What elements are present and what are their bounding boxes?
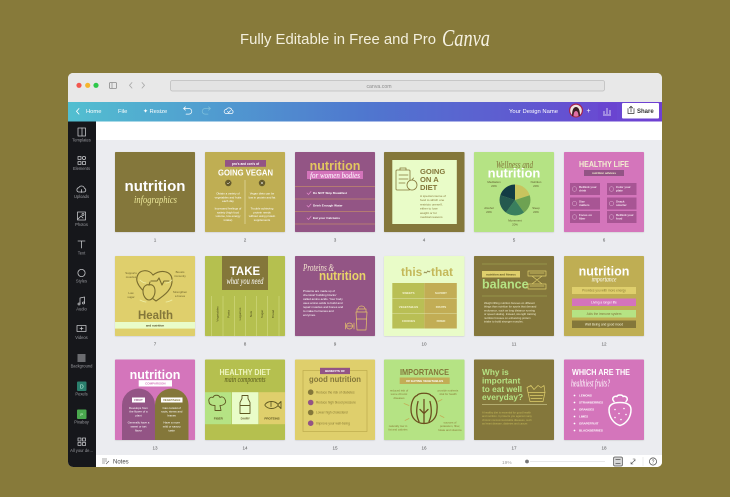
card 5: wellness and nutrition pie chart: 20%	[486, 210, 492, 214]
card 13: nutrition comparison: Can consist of	[163, 406, 181, 410]
icon: bottle	[240, 396, 250, 414]
card 15: benefits of good nutrition: Reduce high blood pressure	[316, 401, 356, 405]
card 7: health and nutrition: a bones	[175, 294, 186, 298]
card 16: importance of eating vegetables: 16	[421, 446, 427, 450]
card 18: which are the healthiest fruits: LIMES	[579, 414, 588, 418]
card 10: this or that table	[384, 256, 464, 346]
card 16: importance of eating vegetables: naturally low in	[389, 424, 408, 428]
card 3: nutrition for women bodies	[295, 152, 375, 242]
avatar	[569, 104, 583, 118]
card 2: going vegan: intake)	[224, 218, 232, 222]
card 9: proteins and nutrition: called amino acids. Your body	[303, 297, 343, 301]
card 12: nutrition importance: nutrition	[579, 264, 629, 278]
card 1: nutrition infographics: nutrition	[124, 178, 186, 195]
card 3: nutrition for women bodies: Do NOT Skip Breakfast	[313, 191, 347, 195]
card 2: going vegan: 2	[244, 238, 247, 242]
left sidebar: Styles	[76, 278, 87, 284]
card 9: proteins and nutrition: enzymes.	[303, 313, 316, 317]
card 14: healthy diet: main components	[224, 375, 266, 384]
card 6: healthy life: smarter	[616, 203, 627, 207]
icon: lettuce	[411, 393, 437, 424]
card 8: take what you need: 8	[244, 342, 247, 346]
card 9: proteins and nutrition: nutrition	[319, 269, 366, 283]
card 13: nutrition comparison: 13	[152, 446, 158, 450]
card 13: nutrition comparison: roots, stems and	[161, 410, 183, 414]
card 2: going vegan: without using protein	[249, 214, 276, 218]
card 6: healthy life: HEALTHY LIFE	[579, 159, 629, 169]
card 7: health and nutrition: Low	[128, 291, 135, 295]
left sidebar: All your de...	[70, 448, 93, 453]
card 3: nutrition for women bodies: nutrition	[310, 159, 360, 173]
card 5: wellness and nutrition pie chart: Sleep	[532, 206, 540, 210]
card 10: this or that table: VEGETABLES	[399, 305, 418, 309]
card 7: health and nutrition: muscles	[126, 275, 137, 279]
card 13: nutrition comparison: nutrition	[130, 368, 180, 382]
bottom status bar: 19%	[502, 460, 512, 466]
pie chart	[500, 184, 530, 215]
card 18: which are the healthiest fruits: LEMONS	[579, 394, 592, 398]
card 6: healthy life: fiber	[579, 216, 586, 220]
card 16: importance of eating vegetables	[384, 360, 464, 450]
card 7: health and nutrition: 7	[154, 342, 157, 346]
card 5: wellness and nutrition pie chart: 20%	[533, 210, 539, 214]
card 18: which are the healthiest fruits	[564, 360, 644, 450]
left sidebar: Templates	[72, 138, 91, 142]
left sidebar	[68, 122, 96, 468]
card 9: proteins and nutrition: to make hormones and	[303, 309, 334, 313]
card 16: importance of eating vegetables: potassium, fiber,	[440, 424, 460, 428]
left sidebar: Background	[71, 364, 93, 368]
card 10: this or that table: 10	[421, 342, 427, 346]
card 16: importance of eating vegetables: fat and calories	[389, 428, 408, 432]
editor top bar: Home	[86, 109, 101, 115]
card 8: take what you need: Legumes	[238, 307, 242, 320]
left sidebar: Videos	[75, 335, 88, 340]
left sidebar: Pexels	[75, 392, 88, 396]
card 11: nutrition and fitness balance: balance	[482, 278, 529, 292]
card 5: wellness and nutrition pie chart: Alcohol	[484, 206, 494, 210]
card 5: wellness and nutrition pie chart: 20%	[533, 184, 539, 188]
card 17: why is important to eat well: to eat well	[482, 384, 522, 394]
card 8: take what you need: what you need	[226, 276, 264, 286]
browser window	[68, 73, 662, 468]
card 16: importance of eating vegetables: some chronic	[391, 392, 408, 396]
card 4: going on a diet: ON A	[420, 175, 439, 184]
card 8: take what you need: Bread	[271, 310, 275, 318]
card 16: importance of eating vegetables: folate and vitamins	[438, 428, 462, 432]
card 18: which are the healthiest fruits: 18	[601, 446, 607, 450]
card 5: wellness and nutrition pie chart: Meditation	[487, 180, 501, 184]
card 4: going on a diet: 4	[423, 238, 426, 242]
card 11: nutrition and fitness balance: Weight lifting nutrition focuses on different	[484, 301, 535, 305]
left sidebar: P	[80, 412, 83, 417]
title: Canva	[442, 26, 490, 52]
left sidebar: D	[80, 384, 84, 390]
card 7: health and nutrition: Health	[138, 310, 173, 322]
icon: basket	[527, 386, 545, 402]
card 10: this or that table: FRIED	[437, 319, 445, 323]
left sidebar: Text	[78, 250, 86, 256]
card 8: take what you need: Sugar	[260, 310, 264, 318]
left sidebar: Photos	[75, 222, 88, 227]
card 13: nutrition comparison: the flower of a	[129, 410, 148, 414]
card 18: which are the healthiest fruits: STRAWBERRIES	[579, 400, 603, 404]
card 12: nutrition importance: Well Being and good mood	[585, 322, 623, 326]
card 9: proteins and nutrition: Proteins &	[302, 263, 334, 274]
card 10: this or that table: COOKIES	[402, 319, 415, 323]
card 9: proteins and nutrition: uses amino acids to build and	[303, 301, 343, 305]
bottom status bar: ?	[652, 460, 655, 466]
card 13: nutrition comparison: taste	[169, 428, 175, 432]
card 15: benefits of good nutrition	[295, 360, 375, 450]
card 7: health and nutrition: immunity	[174, 274, 186, 278]
white ribbon and canvas background	[96, 122, 662, 455]
card 6: healthy life: Rethink your	[579, 185, 598, 189]
card 14: healthy diet: FIBER	[214, 416, 224, 420]
card 8: take what you need: Nuts	[249, 310, 253, 317]
card 16: importance of eating vegetables: reduced risk of	[390, 388, 408, 392]
card 11: nutrition and fitness balance: nutrition focuses on enhancing protein	[484, 316, 531, 320]
card 8: take what you need: Pasta	[226, 310, 230, 318]
browser title bar: canva.com	[366, 84, 392, 90]
card 15: benefits of good nutrition: 15	[332, 446, 338, 450]
card 18: which are the healthiest fruits: GRAPEFRUIT	[579, 422, 599, 426]
card 13: nutrition comparison: leaves	[168, 414, 176, 418]
card 16: importance of eating vegetables: IMPORTANCE	[400, 367, 449, 377]
card 17: why is important to eat well: and nutrition. It protects you against many	[482, 414, 533, 418]
card 8: take what you need: Vegetables	[216, 306, 220, 322]
card 2: going vegan: vegetables and fruits	[215, 195, 242, 199]
card 3: nutrition for women bodies: Eat your Calciums	[313, 216, 340, 220]
card 9: proteins and nutrition: repair muscles and bones and	[303, 305, 344, 309]
card 17: why is important to eat well: A healthy diet is essential for good health	[482, 410, 531, 414]
card 11: nutrition and fitness balance: or speed skating. Instead, strength training	[484, 312, 536, 316]
editor top bar: File	[118, 109, 127, 115]
card 18: which are the healthiest fruits: WHICH ARE THE	[572, 367, 630, 377]
card 2: going vegan: satiety (high food	[217, 210, 239, 214]
card 2: going vegan: Trouble achieving	[251, 206, 274, 210]
card 7: health and nutrition: Boosts	[176, 270, 185, 274]
card 10: this or that table: that	[431, 265, 453, 279]
card 15: benefits of good nutrition: good nutrition	[309, 374, 361, 384]
card 13: nutrition comparison: Develops from	[129, 406, 148, 410]
card 7: health and nutrition: Supports	[125, 271, 137, 275]
card 16: importance of eating vegetables: provide nutrients	[438, 388, 459, 392]
card 16: importance of eating vegetables: vital for health	[439, 392, 457, 396]
card 6: healthy life: Snack	[616, 200, 625, 204]
editor top bar: ✦ Resize	[143, 108, 167, 115]
card 6: healthy life: Rethink your	[616, 213, 635, 217]
card 2: going vegan: supplements	[254, 218, 271, 222]
card 6: healthy life: food	[616, 216, 622, 220]
card 5: wellness and nutrition pie chart: 5	[513, 238, 516, 242]
card 4: going on a diet: restricts oneself,	[420, 202, 443, 206]
icon: heart with apple	[137, 271, 172, 301]
card 6: healthy life: Color your	[616, 185, 631, 189]
card 6: healthy life: plate	[616, 188, 623, 192]
card 4: going on a diet: either to lose	[420, 207, 438, 211]
card 2: going vegan: protein needs	[253, 210, 271, 214]
card 13: nutrition comparison: Generally have a	[128, 420, 150, 424]
card 5: wellness and nutrition pie chart: 20%	[512, 222, 518, 226]
card 8: take what you need	[205, 256, 285, 346]
card 11: nutrition and fitness balance: things than nutrition for sports that demand	[484, 305, 537, 309]
card 3: nutrition for women bodies: Drink Enough Water	[313, 204, 343, 208]
card 15: benefits of good nutrition: Improve your well-being	[316, 421, 350, 425]
icon: broccoli	[209, 395, 226, 410]
icon: scale	[528, 271, 546, 289]
card 5: wellness and nutrition pie chart: 20%	[491, 184, 497, 188]
left sidebar: Pixabay	[74, 420, 90, 424]
card 11: nutrition and fitness balance: intake to build stronger muscles.	[484, 320, 524, 324]
card 17: why is important to eat well: as heart disease, diabetes and cancer.	[482, 422, 528, 426]
editor top bar: +	[586, 108, 591, 115]
card 4: going on a diet: A special course of	[420, 194, 446, 198]
icon: strawberry	[609, 395, 631, 426]
card 12: nutrition importance: importance	[592, 274, 617, 284]
card 4: going on a diet: DIET	[420, 183, 438, 192]
editor top bar	[68, 102, 662, 122]
share button	[622, 103, 659, 118]
card 17: why is important to eat well: chronic noncommunicable diseases, such	[482, 418, 532, 422]
card 14: healthy diet: DAIRY	[241, 416, 250, 420]
card 7: health and nutrition	[115, 256, 195, 346]
card 5: wellness and nutrition pie chart: Movement	[508, 218, 522, 222]
card 12: nutrition importance: Living a longer life	[591, 300, 617, 304]
card 14: healthy diet: 14	[242, 446, 248, 450]
card 15: benefits of good nutrition: BENEFITS OF	[325, 369, 345, 373]
card 13: nutrition comparison: plant	[135, 414, 142, 418]
card 13: nutrition comparison: sweet or tart	[131, 424, 147, 428]
card 4: going on a diet: medical reasons	[420, 215, 443, 219]
card 2: going vegan: pro's and con's of	[232, 162, 260, 166]
card 16: importance of eating vegetables: diseases	[393, 396, 405, 400]
icon: fish	[265, 402, 281, 408]
card 9: proteins and nutrition: Proteins are made up of	[303, 289, 335, 293]
card 17: why is important to eat well: 17	[511, 446, 517, 450]
card 18: which are the healthiest fruits: ORANGES	[579, 408, 594, 412]
card 5: wellness and nutrition pie chart: Nutrition	[531, 180, 542, 184]
card 7: health and nutrition: sugar	[127, 295, 135, 299]
card 6: healthy life: Size	[579, 200, 585, 204]
card 13: nutrition comparison: Have a more	[163, 420, 180, 424]
card 5: wellness and nutrition pie chart: Wellness and	[496, 160, 534, 171]
card 4: going on a diet: food to which one	[420, 198, 445, 202]
card 12: nutrition importance: 12	[601, 342, 607, 346]
editor top bar: Your Design Name	[509, 109, 558, 115]
card 6: healthy life: drink	[579, 188, 586, 192]
title: Fully Editable in Free and Pro	[240, 32, 436, 48]
card 12: nutrition importance: Provides you with more energy	[582, 289, 626, 293]
card 10: this or that table: SWEETS	[402, 291, 415, 295]
left sidebar: Elements	[73, 166, 90, 171]
card 6: healthy life: nutrition advices	[592, 171, 616, 175]
card 14: healthy diet: PROTEINS	[264, 416, 280, 420]
title	[240, 26, 490, 52]
card 12: nutrition importance: Aids the immune system	[587, 312, 622, 316]
card 11: nutrition and fitness balance: 11	[512, 342, 517, 346]
card 17: why is important to eat well: everyday?	[482, 392, 523, 402]
card 9: proteins and nutrition: chemical 'building blocks'	[303, 293, 337, 297]
card 7: health and nutrition: Strengthen	[173, 290, 187, 294]
card 13: nutrition comparison	[115, 360, 195, 450]
card 16: importance of eating vegetables: OF EATING VEGETABLES	[406, 379, 443, 383]
card 17: why is important to eat well: Why is	[482, 367, 509, 377]
card 8: take what you need: TAKE	[230, 266, 261, 278]
card 15: benefits of good nutrition: Reduce the risk of diabetes	[316, 390, 355, 394]
card 2: going vegan: each day	[222, 199, 234, 203]
card 13: nutrition comparison: flavor	[135, 428, 142, 432]
left sidebar: Uploads	[74, 194, 89, 199]
card 6: healthy life: matters	[579, 203, 590, 207]
card 4: going on a diet	[384, 152, 464, 242]
card 13: nutrition comparison: VEGETABLE	[163, 398, 180, 402]
card 6: healthy life: Focus on	[579, 213, 592, 217]
card 14: healthy diet	[205, 360, 285, 450]
card 6: healthy life	[564, 152, 644, 242]
card 17: why is important to eat well: important	[482, 376, 520, 386]
browser title bar	[68, 73, 662, 102]
card 3: nutrition for women bodies: for women bodies	[310, 171, 360, 180]
card 10: this or that table: FRUITS	[436, 305, 446, 309]
card 1: nutrition infographics: infographics	[134, 194, 177, 206]
card 13: nutrition comparison: FRUIT	[134, 398, 143, 402]
card 1: nutrition infographics: 1	[154, 238, 157, 242]
share button: Share	[637, 109, 654, 115]
card 14: healthy diet: HEALTHY DIET	[220, 368, 271, 377]
bottom status bar: Notes	[113, 460, 129, 466]
card 4: going on a diet: GOING	[420, 167, 445, 176]
card 18: which are the healthiest fruits: BLACKBERRIES	[579, 428, 603, 432]
card 13: nutrition comparison: COMPARISON	[145, 382, 166, 386]
card 2: going vegan: low in protein and fat	[249, 195, 276, 199]
card 9: proteins and nutrition: 9	[334, 342, 337, 346]
card 13: nutrition comparison: mild or savory	[163, 424, 181, 428]
card 5: wellness and nutrition pie chart	[474, 152, 554, 242]
card 5: wellness and nutrition pie chart: nutrition	[488, 166, 540, 180]
bottom status bar	[102, 456, 662, 467]
card 2: going vegan	[205, 152, 285, 242]
left sidebar: Audio	[76, 306, 87, 312]
card 9: proteins and nutrition	[295, 256, 375, 346]
card 17: why is important to eat well	[474, 360, 554, 450]
card 11: nutrition and fitness balance: nutrition and fitness	[486, 272, 516, 276]
card 7: health and nutrition: and nutrition	[146, 324, 164, 328]
card 2: going vegan: Vegan diets can be	[250, 192, 275, 196]
card 2: going vegan: Obtain a variety of	[216, 192, 240, 196]
card 12: nutrition importance	[564, 256, 644, 346]
card 10: this or that table: this	[401, 265, 423, 279]
card 2: going vegan: GOING VEGAN	[218, 168, 273, 178]
card 2: going vegan: Increased feelings of	[215, 206, 242, 210]
card 4: going on a diet: weight or for	[420, 211, 437, 215]
icon: clipboard and apple	[396, 168, 417, 190]
card 11: nutrition and fitness balance	[474, 256, 554, 346]
card 18: which are the healthiest fruits: healthiest fruits?	[571, 378, 610, 390]
card 1: nutrition infographics	[115, 152, 195, 242]
card 11: nutrition and fitness balance: endurance, such as long distance running	[484, 308, 535, 312]
card 16: importance of eating vegetables: sources of	[444, 420, 457, 424]
icon: shaker and dumbbell	[346, 306, 367, 330]
card 6: healthy life: 6	[603, 238, 606, 242]
card 3: nutrition for women bodies: 3	[334, 238, 337, 242]
card 15: benefits of good nutrition: Lower high cholesterol	[316, 411, 348, 415]
card 2: going vegan: volume, low energy	[216, 214, 241, 218]
card 10: this or that table: SAVORY	[435, 291, 447, 295]
